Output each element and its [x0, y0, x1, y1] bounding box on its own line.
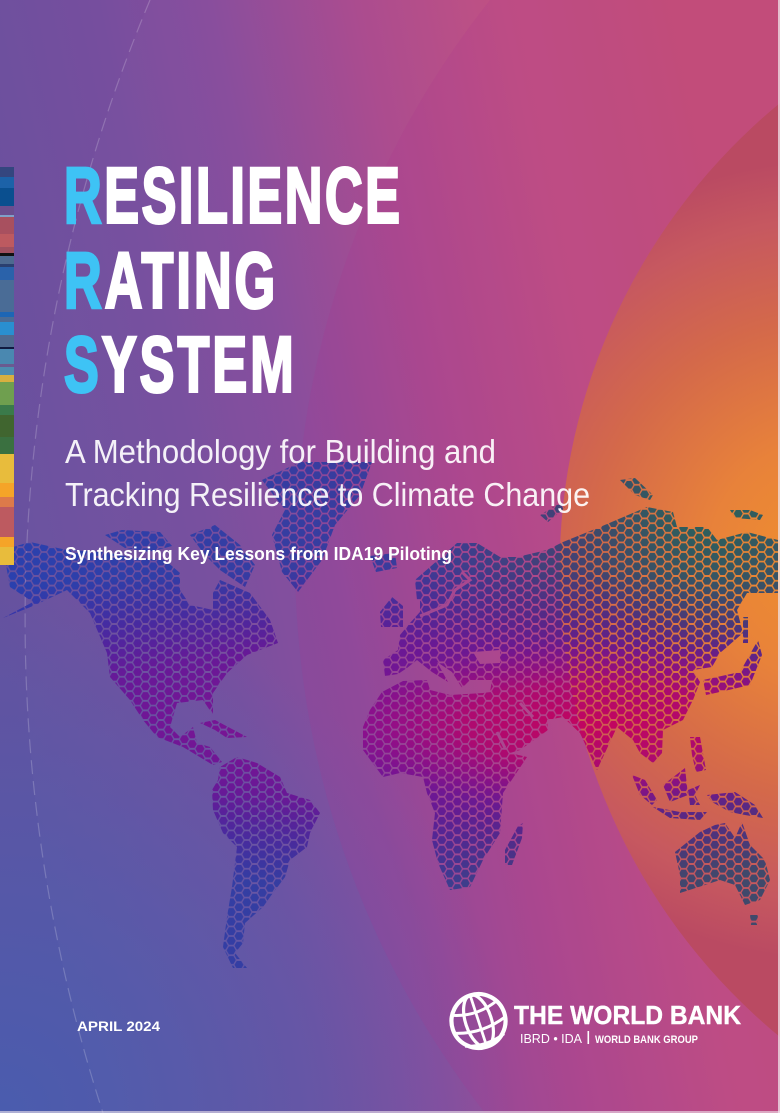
title: RESILIENCE [64, 152, 400, 240]
colour strip [0, 167, 14, 565]
icon: globe [444, 987, 513, 1055]
subtitle: Tracking Resilience to Climate Change [65, 476, 590, 513]
sub-brand line: WORLD BANK GROUP [595, 1034, 698, 1046]
tagline: Synthesizing Key Lessons from IDA19 Piloting [65, 544, 452, 564]
title: SYSTEM [64, 321, 294, 409]
world map of hexagons [4, 462, 778, 968]
sub-brand line: IBRD • IDA [520, 1031, 582, 1046]
sub-brand line [520, 1031, 698, 1046]
subtitle [65, 433, 590, 513]
subtitle: A Methodology for Building and [65, 433, 496, 470]
logo: The World Bank [444, 987, 741, 1055]
title: RATING [64, 237, 275, 325]
date: APRIL 2024 [77, 1019, 161, 1034]
title [64, 152, 400, 409]
wordmark: THE WORLD BANK [514, 1000, 741, 1030]
